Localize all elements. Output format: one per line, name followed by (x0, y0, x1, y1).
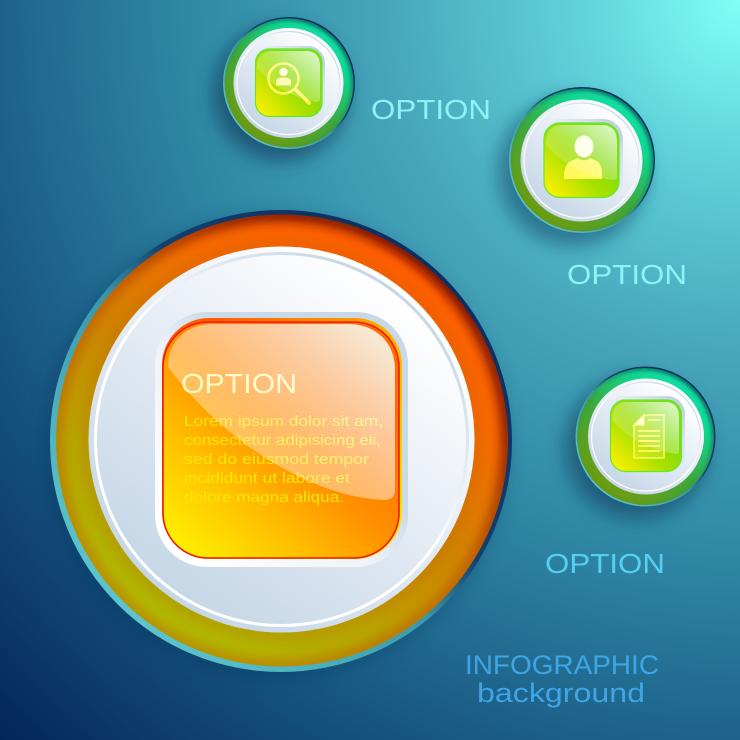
card heading: OPTION (181, 368, 297, 399)
orange glossy card (162, 318, 402, 559)
card body text: dolore magna aliqua. (184, 489, 344, 506)
icon: user (564, 136, 602, 179)
label: option one: OPTION (371, 94, 491, 125)
label: option three: OPTION (545, 548, 665, 579)
card body text: Lorem ipsum dolor sit am, (184, 413, 383, 430)
main ring shadow (44, 214, 508, 678)
button: user (498, 87, 655, 246)
gloss highlight (257, 51, 320, 102)
footer title (465, 650, 659, 708)
footer title: background (477, 678, 645, 708)
label: option two: OPTION (567, 259, 687, 290)
gloss highlight (546, 125, 617, 180)
disc inner line (96, 254, 468, 626)
button: document (565, 366, 716, 519)
icon: document (634, 415, 664, 458)
orange ring (56, 214, 508, 666)
card body text: sed do eiusmod tempor (184, 451, 369, 468)
white disc (88, 246, 474, 632)
card body text: incididunt ut labore et (184, 470, 351, 487)
gloss highlight (612, 402, 679, 454)
card body text: consectetur adipisicing eli, (184, 432, 381, 449)
square frame (155, 312, 408, 567)
main ring panel (44, 210, 512, 678)
footer title: INFOGRAPHIC (465, 650, 659, 680)
main ring outer rim (50, 210, 512, 672)
gloss highlight (168, 324, 395, 500)
icon: magnifier with user (268, 64, 309, 103)
button: search user (213, 17, 355, 161)
card body text (184, 413, 383, 506)
